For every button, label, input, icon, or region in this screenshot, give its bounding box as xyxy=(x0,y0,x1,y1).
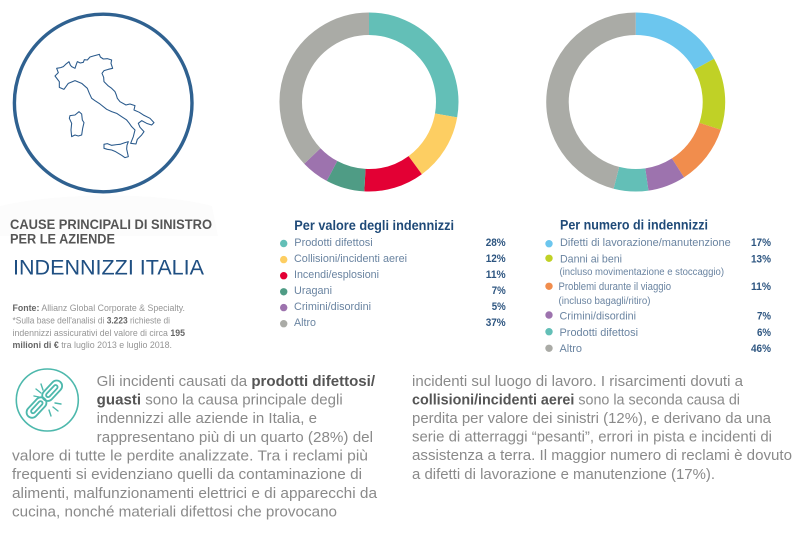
text block: body right column: perdita per valore dei sinistri (12%), e derivano da una xyxy=(412,410,772,427)
text block: body right column: assistenza a terra. Il maggior numero di reclami è dovuto xyxy=(412,447,792,464)
legend row: difetti di lavorazione: Difetti di lavorazione/manutenzione xyxy=(560,237,731,249)
legend row: altro: Altro xyxy=(294,317,316,329)
segment: uragani 7% xyxy=(332,171,365,180)
legend row: prodotti difettosi xyxy=(280,237,506,249)
legend row: crimini: Crimini/disordini xyxy=(294,301,371,313)
legend heading: Per valore degli indennizzi xyxy=(294,218,454,233)
legend row: altro: 37% xyxy=(486,317,506,329)
legend row: altro xyxy=(545,343,771,355)
text block: body left column: indennizzi alle aziende in Italia, e xyxy=(97,410,317,427)
heading: cause principali: CAUSE PRINCIPALI DI SINISTRO xyxy=(10,217,212,232)
legend: per valore degli indennizzi xyxy=(280,218,506,329)
segment: incendi/esplosioni 11% xyxy=(365,165,415,180)
segment: altro 46% xyxy=(557,24,636,178)
legend row: crimini xyxy=(545,310,771,322)
text block: body right column xyxy=(412,373,792,483)
legend row: collisioni: 12% xyxy=(486,253,506,265)
legend row: collisioni xyxy=(280,253,506,265)
legend row: prodotti difettosi: Prodotti difettosi xyxy=(560,327,638,339)
legend: per numero di indennizzi xyxy=(545,218,771,355)
legend row: prodotti difettosi xyxy=(545,327,771,339)
text block: body left column: guasti sono la causa principale degli xyxy=(97,392,343,409)
text block: body left column: alimenti, malfunzionamenti elettrici e di apparecchi da xyxy=(12,485,378,502)
text block: body left column xyxy=(12,373,378,520)
text block: body right column: serie di atterraggi “pesanti”, errori in pista e incidenti di xyxy=(412,428,772,446)
segment: problemi durante il viaggio 11% xyxy=(678,126,710,168)
legend row: altro xyxy=(280,317,506,329)
legend row: crimini: Crimini/disordini xyxy=(560,310,636,322)
segment: prodotti difettosi 6% xyxy=(616,178,647,180)
legend row: problemi durante il viaggio: 11% xyxy=(751,281,771,293)
legend row: problemi durante il viaggio: Problemi durante il viaggio xyxy=(558,281,671,293)
text block: body right column: a difetti di lavorazione e manutenzione (17%). xyxy=(412,466,715,483)
legend row: uragani: 7% xyxy=(492,285,506,297)
legend row: incendi: Incendi/esplosioni xyxy=(294,269,379,281)
legend row: danni ai beni xyxy=(545,254,771,278)
legend row: prodotti difettosi: 6% xyxy=(757,327,771,339)
segment: prodotti difettosi 28% xyxy=(369,24,447,115)
legend row: danni ai beni: (incluso movimentazione e stoccaggio) xyxy=(560,267,724,278)
legend row: crimini: 7% xyxy=(757,310,771,322)
legend heading: Per numero di indennizzi xyxy=(560,218,708,232)
legend row: problemi durante il viaggio xyxy=(545,281,771,307)
segment: danni ai beni 13% xyxy=(704,64,714,126)
legend row: difetti di lavorazione: 17% xyxy=(751,237,771,249)
legend row: incendi: 11% xyxy=(486,269,506,281)
legend row: crimini: 5% xyxy=(492,301,506,313)
segment: difetti di lavorazione 17% xyxy=(636,24,704,64)
text block: body left column: cucina, nonché materiali difettosi che provocano xyxy=(12,504,337,520)
legend row: uragani xyxy=(280,285,506,297)
donut chart: per numero di indennizzi xyxy=(557,24,714,180)
source note: *Sulla base dell'analisi di 3.223 richieste di xyxy=(12,316,170,326)
heading: cause principali: PER LE AZIENDE xyxy=(10,231,115,246)
text block: body left column: valore di tutte le perdite analizzate. Tra i reclami più xyxy=(12,448,368,464)
segment: collisioni/incidenti aerei 12% xyxy=(415,115,446,165)
source note: Fonte: Allianz Global Corporate & Specialty. xyxy=(12,303,185,314)
segment: crimini/disordini 5% xyxy=(312,156,332,171)
text block: body right column: collisioni/incidenti aerei sono la seconda causa di xyxy=(412,392,740,409)
icon: map of Italy in circle xyxy=(14,14,192,192)
legend row: danni ai beni: Danni ai beni xyxy=(560,254,622,266)
legend row: danni ai beni: 13% xyxy=(751,254,771,266)
source note: milioni di € tra luglio 2013 e luglio 2018. xyxy=(12,340,172,351)
donut chart: per valore degli indennizzi xyxy=(291,24,447,180)
legend row: prodotti difettosi: 28% xyxy=(486,237,506,249)
segment: crimini/disordini 7% xyxy=(647,168,678,179)
text block: body left column: rappresentano più di un quarto (28%) del xyxy=(97,429,373,446)
legend row: crimini xyxy=(280,301,506,313)
text block: body left column: Gli incidenti causati da prodotti difettosi/ xyxy=(97,373,376,390)
segment: altro 37% xyxy=(291,24,369,156)
source note: indennizzi assicurativi del valore di circa 195 xyxy=(12,328,186,339)
legend row: incendi xyxy=(280,269,506,281)
text block: body right column: incidenti sul luogo di lavoro. I risarcimenti dovuti a xyxy=(412,373,744,390)
legend row: uragani: Uragani xyxy=(294,285,332,297)
legend row: altro: Altro xyxy=(560,343,582,355)
legend row: altro: 46% xyxy=(751,343,771,355)
legend row: problemi durante il viaggio: (incluso bagagli/ritiro) xyxy=(558,296,650,307)
source note xyxy=(12,303,186,351)
legend row: collisioni: Collisioni/incidenti aerei xyxy=(294,253,407,265)
heading: cause principali xyxy=(10,217,212,246)
legend row: prodotti difettosi: Prodotti difettosi xyxy=(294,237,373,249)
icon: broken chain link in circle xyxy=(16,369,78,431)
text block: body left column: frequenti si evidenziano quelli da contaminazione di xyxy=(12,466,362,483)
title: indennizzi Italia: INDENNIZZI ITALIA xyxy=(13,256,204,279)
